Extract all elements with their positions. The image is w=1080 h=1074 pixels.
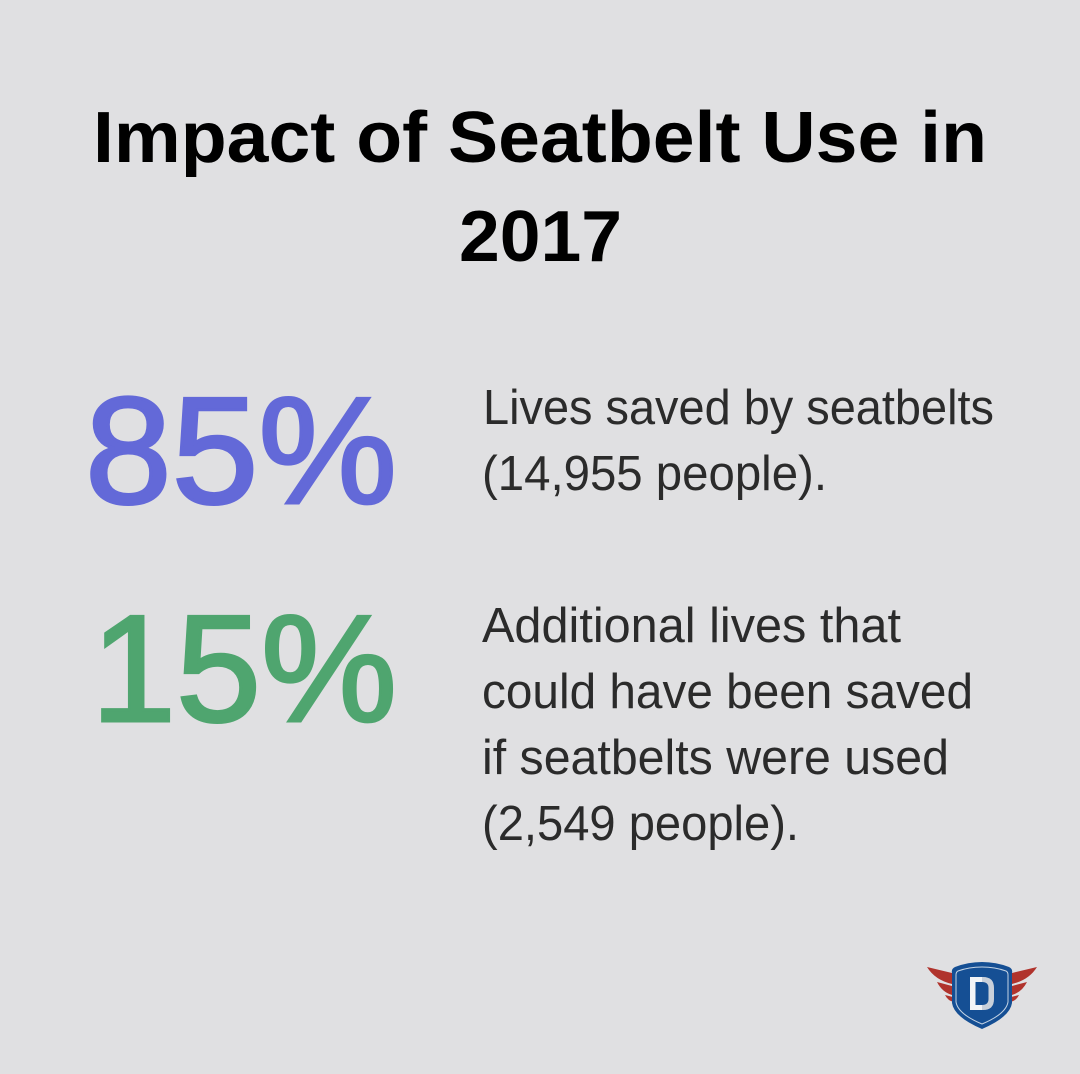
D letter	[970, 977, 994, 1010]
stat description: additional lives: if seatbelts were used	[482, 731, 949, 785]
stat description: additional lives: (2,549 people).	[482, 797, 799, 851]
stat value: 15%: 15%	[91, 584, 397, 754]
logo: winged shield with D	[927, 962, 1037, 1029]
left wing	[927, 967, 954, 1002]
title: Impact of Seatbelt Use in	[93, 98, 987, 178]
title: 2017	[459, 197, 622, 277]
shield	[952, 962, 1012, 1029]
stat description: additional lives: Additional lives that	[482, 599, 901, 653]
stat description: additional lives	[482, 599, 973, 851]
stat description: additional lives: could have been saved	[482, 665, 973, 719]
title	[93, 98, 987, 277]
stat row: 15 percent additional lives	[91, 584, 973, 851]
stat description: lives saved	[482, 381, 994, 501]
stat description: lives saved: Lives saved by seatbelts	[483, 381, 994, 435]
right wing	[1010, 967, 1037, 1002]
stat row: 85 percent lives saved	[85, 366, 994, 536]
stat value: 85%: 85%	[85, 366, 397, 536]
stat description: lives saved: (14,955 people).	[482, 447, 827, 501]
shield inner outline	[956, 967, 1008, 1024]
